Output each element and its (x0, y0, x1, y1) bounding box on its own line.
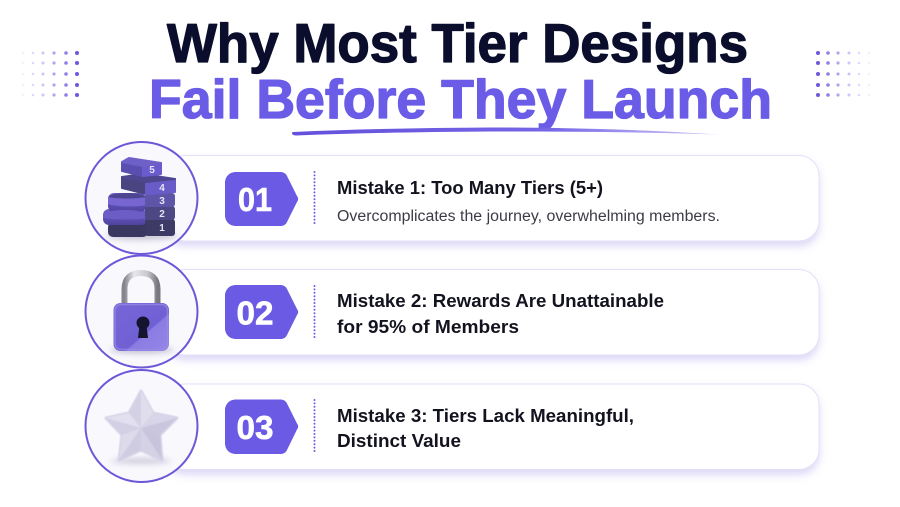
badge 02 (225, 285, 298, 339)
icon: numbered tier stack (103, 158, 178, 240)
mistake 1 heading: Mistake 1: Too Many Tiers (5+) (337, 177, 603, 198)
panel: mistake 3 (86, 370, 819, 482)
circle 3 (86, 370, 198, 482)
circle 2 (86, 256, 198, 368)
badge 03 (225, 400, 298, 454)
tier numbers: 3 (159, 196, 165, 207)
title line 1: Why Most Tier Designs (167, 12, 748, 74)
mistake 2 heading (337, 290, 664, 337)
dotted divider 2 (314, 286, 316, 340)
dotted divider 3 (314, 400, 316, 454)
tier numbers: 4 (159, 183, 165, 194)
card 3 background (165, 384, 819, 470)
panel: mistake 2 (86, 256, 819, 368)
tier numbers: 1 (159, 223, 165, 234)
block 4 (122, 177, 146, 194)
tier numbers: 2 (159, 209, 165, 220)
badge 01 (225, 172, 298, 226)
mistake 3 heading: Mistake 3: Tiers Lack Meaningful, (337, 405, 634, 426)
block 5 (122, 162, 143, 176)
panel: mistake 1 (86, 142, 819, 254)
icon: padlock (110, 273, 174, 354)
card 1 background (165, 156, 819, 241)
tier numbers (149, 165, 165, 234)
mistake 3 heading (337, 405, 634, 451)
icon: star (106, 391, 177, 464)
circle 1 (86, 142, 198, 254)
mistake 2 heading: Mistake 2: Rewards Are Unattainable (337, 290, 664, 311)
dot pattern right (816, 51, 870, 97)
title line 2: Fail Before They Launch (149, 68, 772, 130)
mistake 3 heading: Distinct Value (337, 430, 461, 451)
badge 01: 01 (238, 181, 272, 218)
title underline (292, 128, 718, 136)
badge 02: 02 (236, 294, 274, 332)
tier numbers: 5 (149, 165, 155, 176)
mistake 1 description: Overcomplicates the journey, overwhelming members. (337, 208, 720, 225)
title (149, 12, 772, 136)
card 2 background (165, 270, 819, 355)
badge 03: 03 (236, 409, 274, 446)
dot pattern left (22, 51, 79, 97)
dotted divider 1 (314, 172, 316, 226)
mistake 2 heading: for 95% of Members (337, 316, 519, 337)
